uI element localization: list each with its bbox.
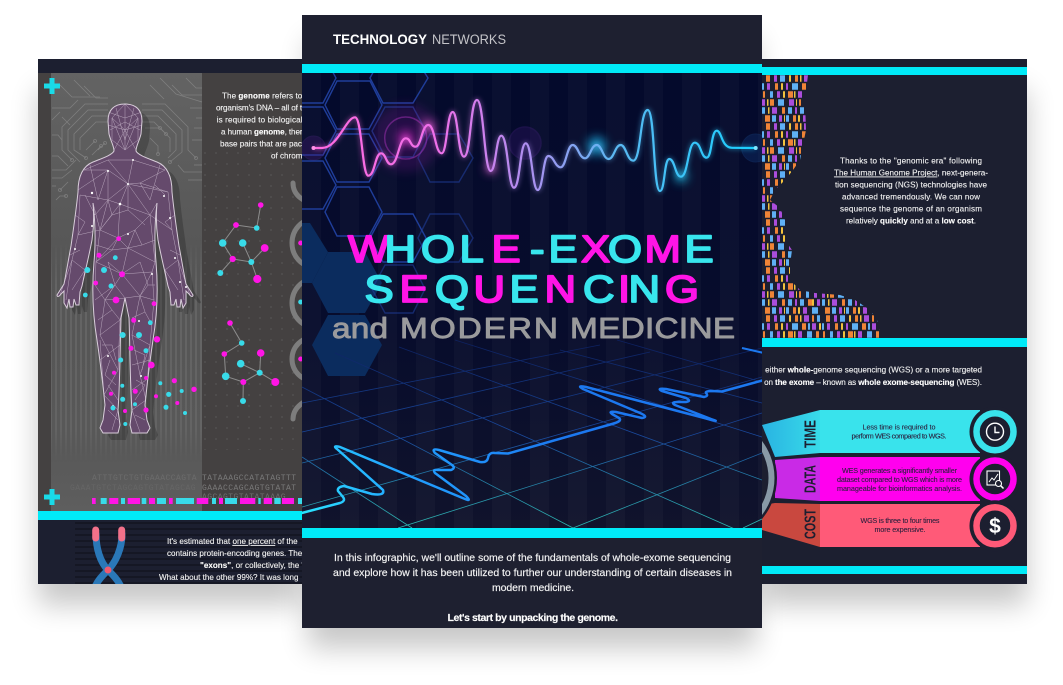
cyan bottom bar	[762, 566, 1027, 574]
cyan bar bottom	[302, 528, 762, 538]
title: -	[530, 228, 545, 270]
DNA barcode silhouette	[762, 75, 882, 338]
title: E	[492, 228, 521, 270]
ribbon: TIME: perform WES compared to WGS.	[852, 432, 946, 440]
intro text	[333, 552, 732, 624]
title: N	[628, 268, 660, 310]
title: MODERN	[400, 312, 558, 344]
WGS vs WES text: y on the exome – known as whole exome-sequencing (WES).	[758, 378, 982, 387]
title: O	[421, 228, 455, 270]
genomic era text: tion sequencing (NGS) technologies have	[835, 180, 987, 190]
genomic era text: sequence the genome of an organism	[840, 204, 982, 214]
logo	[333, 32, 506, 47]
glow halos	[302, 104, 770, 182]
title: N	[545, 268, 576, 310]
DNA sequence letters	[70, 474, 296, 499]
intro text: Let's start by unpacking the genome.	[448, 612, 618, 624]
exome text block: contains protein-encoding genes. The	[167, 549, 303, 558]
intro text: In this infographic, we'll outline some of the fundamentals of whole-exome sequencing	[334, 552, 731, 564]
title: E	[509, 268, 539, 310]
genome text block: organism's DNA – all of the	[216, 104, 311, 112]
ribbon: DATA: manageable for bioinformatics analysis.	[837, 484, 962, 493]
icon: data chart with magnifier	[970, 457, 1017, 500]
DNA sequence letters: GAAACCAGCAGTGTATAT	[202, 484, 297, 493]
DNA sequence letters: ATTTGTCTGTGAAACCAGTA	[92, 474, 197, 483]
cyan top bar	[762, 67, 1027, 75]
intro text: modern medicine.	[492, 582, 574, 594]
ribbon: TIME: Less time is required to	[862, 422, 936, 432]
logo: NETWORKS	[432, 32, 506, 47]
title: W	[348, 228, 390, 270]
title: E	[684, 228, 714, 270]
genome text block: a human genome, there	[221, 128, 307, 136]
grey helix	[290, 180, 302, 422]
title: G	[665, 268, 699, 310]
genome text block: of chrom	[271, 152, 303, 160]
ribbon: TIME	[762, 410, 980, 457]
genomic era text: Thanks to the "genomic era" following	[840, 156, 982, 166]
title: E	[400, 268, 429, 310]
cyan mid bar	[762, 338, 1027, 347]
ribbon: DATA: dataset compared to WGS which is more	[837, 475, 962, 484]
ribbon: COST	[762, 503, 980, 547]
title: U	[473, 268, 505, 310]
title: I	[618, 268, 630, 310]
cyan divider	[38, 511, 302, 520]
ECG top fragment	[742, 348, 764, 353]
molecule 2	[222, 320, 279, 404]
icon: plus bottom	[44, 489, 60, 505]
title: Q	[435, 268, 469, 310]
WGS vs WES text	[758, 366, 982, 387]
panel: cover artwork	[302, 73, 762, 528]
cyan bar top	[302, 64, 762, 73]
WGS vs WES text: either whole-genome sequencing (WGS) or a more targeted	[765, 366, 982, 374]
molecule 1	[217, 202, 269, 283]
title: MEDICINE	[570, 312, 735, 344]
DNA sequence letters: AGCAGTGTATATAAAG	[202, 493, 286, 502]
genome text block	[216, 92, 302, 158]
icon: clock	[970, 410, 1017, 454]
title: and	[332, 312, 388, 344]
title: E	[549, 228, 578, 270]
circuit board pattern	[52, 78, 202, 200]
icon: chromosome	[93, 530, 123, 592]
genome text block: The genome refers to the	[222, 92, 316, 100]
central wheel ring	[762, 441, 777, 519]
panel: right page, genomic era	[762, 59, 1027, 584]
exome text block: What about the other 99%? It was long	[159, 573, 298, 582]
ribbon: COST: COST	[802, 509, 820, 539]
DNA sequence letters: TATAAAGCCATATAGTTT	[202, 474, 297, 483]
filled hexagons	[302, 223, 382, 376]
genomic era text: The Human Genome Project, next-genera-	[834, 168, 988, 178]
title: L	[460, 228, 484, 270]
ribbon: DATA: WES generates a significantly smaller	[842, 466, 958, 475]
title: H	[385, 228, 416, 270]
DNA sequence letters: GAAATGTCTAGCAGTGTATAGCAG	[70, 484, 196, 493]
title	[332, 234, 734, 339]
genomic era text: relatively quickly and at a low cost.	[846, 216, 976, 226]
human body figure	[57, 104, 201, 440]
title: X	[581, 228, 610, 270]
ECG line	[298, 380, 764, 514]
intro text: and explore how it has been utilized to further our understanding of certain diseases in	[333, 567, 732, 579]
perspective grid	[302, 340, 762, 530]
title: S	[365, 268, 394, 310]
title: M	[644, 228, 681, 270]
outlined hexagons	[302, 73, 474, 314]
ribbon: COST: WGS is three to four times	[860, 516, 940, 525]
panel: lighter figure column	[51, 73, 302, 512]
icon: dollar: $	[989, 515, 1001, 538]
sound wave	[312, 100, 758, 191]
genome text block: base pairs that are pack	[220, 140, 307, 148]
sequence bar	[92, 498, 302, 504]
genomic era text	[834, 156, 988, 226]
ribbon: DATA: DATA	[802, 465, 820, 493]
logo: TECHNOLOGY	[333, 32, 427, 47]
panel: left page, the genome	[38, 59, 302, 584]
title: O	[608, 228, 642, 270]
exome text block: "exons", or collectively, the "	[200, 561, 305, 570]
title: C	[583, 268, 615, 310]
panel: centre cover page	[276, 15, 770, 628]
genome text block: is required to biologically	[217, 116, 310, 124]
ribbon: DATA	[775, 457, 980, 501]
data dots over body	[83, 236, 197, 426]
ribbon: TIME: TIME	[802, 420, 820, 448]
exome text block	[159, 537, 305, 582]
icon: dollar	[970, 500, 1017, 548]
ribbon: COST: more expensive.	[874, 525, 926, 534]
icon: plus top	[44, 78, 60, 94]
genomic era text: advanced tremendously. We can now	[842, 192, 980, 202]
exome text block: It's estimated that one percent of the	[167, 537, 298, 546]
